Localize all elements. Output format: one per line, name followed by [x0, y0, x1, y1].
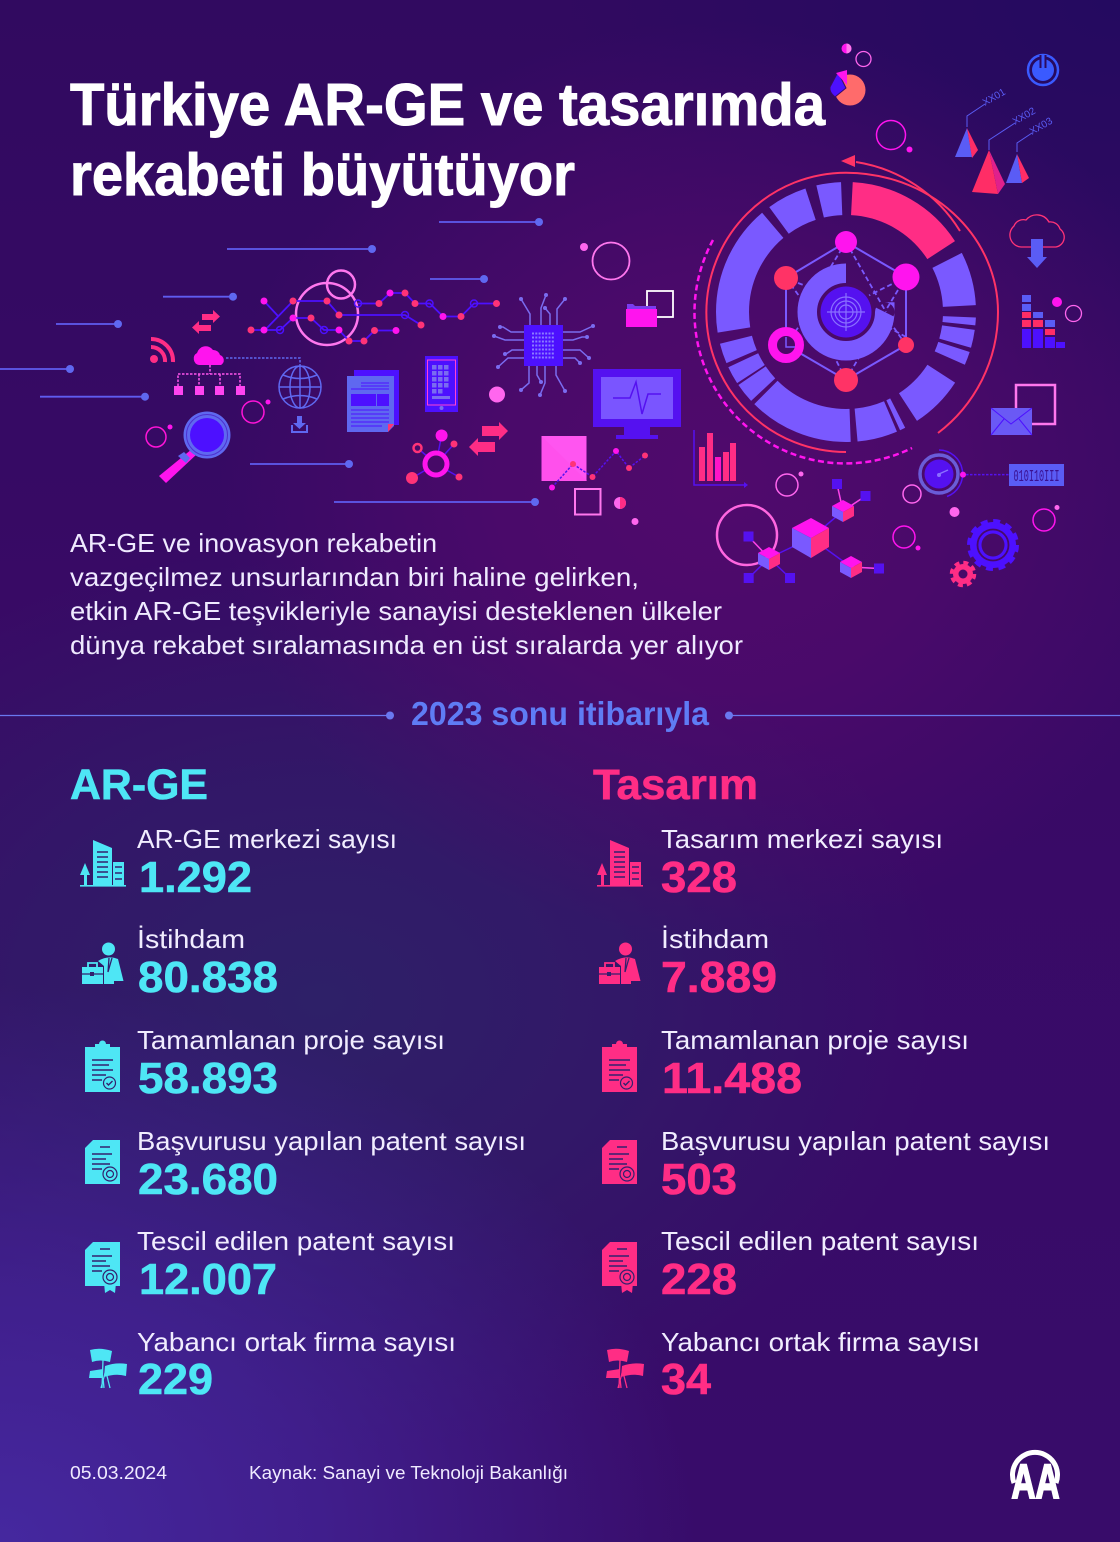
- stat: Tamamlanan proje sayısı: [602, 1025, 969, 1103]
- date divider heading: [0, 695, 1120, 732]
- decorative connector lines with dots: [0, 218, 543, 506]
- icon: exchange arrows large: [469, 422, 508, 456]
- footer source: Kaynak: Sanayi ve Teknoloji Bakanlığı: [249, 1463, 568, 1483]
- stat: Tasarım merkezi sayısı: [597, 824, 943, 902]
- cube network: [717, 479, 884, 583]
- icon: download: [292, 416, 307, 432]
- title: rekabeti büyütüyor: [70, 142, 575, 208]
- icon: cloud download: [1010, 215, 1064, 268]
- pyramid chart: XX03: [1028, 116, 1055, 138]
- central circular data dial: [694, 155, 998, 463]
- stat: İstihdam: İstihdam: [137, 924, 245, 954]
- icon: large gear: [969, 521, 1017, 569]
- footer date: 05.03.2024: [70, 1463, 167, 1483]
- stat: Başvurusu yapılan patent sayısı: [85, 1126, 526, 1204]
- stat: Yabancı ortak firma sayısı: Yabancı ortak firma sayısı: [661, 1327, 980, 1357]
- icon: power: [1028, 55, 1058, 85]
- icon: stacked bars: [1022, 295, 1082, 348]
- icon: envelope: [991, 385, 1055, 435]
- icon: newspaper document: [347, 370, 399, 432]
- intro paragraph: etkin AR-GE teşvikleriyle sanayisi desteklenen ülkeler: [70, 596, 722, 626]
- title: [70, 72, 826, 208]
- stat: Tescil edilen patent sayısı: [602, 1226, 979, 1304]
- heading: AR-GE: AR-GE: [70, 761, 208, 809]
- panel: Tasarım: [593, 761, 1050, 1404]
- stat: Tescil edilen patent sayısı: 12.007: [139, 1255, 277, 1304]
- ring and dot: [876, 120, 912, 152]
- icon: globe: [279, 366, 321, 408]
- stat: Tamamlanan proje sayısı: Tamamlanan proje sayısı: [661, 1025, 969, 1055]
- small rings left: [146, 400, 270, 447]
- dot: [489, 386, 505, 402]
- intro paragraph: vazgeçilmez unsurlarından biri haline gelirken,: [70, 562, 639, 592]
- stat: İstihdam: İstihdam: [661, 924, 769, 954]
- icon: bar chart: [694, 430, 748, 488]
- stat: AR-GE merkezi sayısı: AR-GE merkezi sayısı: [137, 824, 397, 854]
- icon: tablet: [425, 356, 458, 412]
- rings near pie chart: [842, 44, 871, 66]
- pyramid chart: [955, 87, 1055, 194]
- pyramid chart: XX01: [981, 87, 1008, 109]
- stat: Yabancı ortak firma sayısı: Yabancı ortak firma sayısı: [137, 1327, 456, 1357]
- icon: small gear: [952, 562, 974, 586]
- intro paragraph: AR-GE ve inovasyon rekabetin: [70, 528, 437, 558]
- stat: İstihdam: 7.889: [661, 953, 777, 1002]
- stat: Tescil edilen patent sayısı: [85, 1226, 455, 1304]
- stat: İstihdam: [82, 924, 278, 1002]
- stat: Tescil edilen patent sayısı: Tescil edilen patent sayısı: [137, 1226, 455, 1256]
- stat: Başvurusu yapılan patent sayısı: Başvurusu yapılan patent sayısı: [137, 1126, 526, 1156]
- icon: exchange arrows small: [192, 310, 220, 334]
- stat: Tescil edilen patent sayısı: Tescil edilen patent sayısı: [661, 1226, 979, 1256]
- network node icon centre: [406, 430, 462, 484]
- ring and dot top centre: [580, 242, 630, 280]
- icon: pie chart: [830, 70, 866, 106]
- intro paragraph: [70, 528, 743, 660]
- stat: Başvurusu yapılan patent sayısı: Başvurusu yapılan patent sayısı: [661, 1126, 1050, 1156]
- icon: folder with square: [626, 291, 673, 327]
- icon: microchip: [492, 293, 595, 397]
- scattered rings and dots right: [776, 472, 1060, 550]
- icon: monitor: [593, 369, 681, 439]
- icon: rss: [150, 339, 173, 363]
- stat: Yabancı ortak firma sayısı: 229: [138, 1355, 213, 1404]
- stat: Başvurusu yapılan patent sayısı: [602, 1126, 1050, 1204]
- icon: cloud hierarchy: [174, 346, 300, 395]
- date divider heading: 2023 sonu itibarıyla: [411, 695, 710, 732]
- intro paragraph: dünya rekabet sıralamasında en üst sıralarda yer alıyor: [70, 630, 743, 660]
- heading: Tasarım: Tasarım: [593, 761, 758, 809]
- stat: Tamamlanan proje sayısı: [85, 1025, 445, 1103]
- stat: Yabancı ortak firma sayısı: 34: [661, 1355, 712, 1404]
- logo: AA: [1012, 1452, 1060, 1509]
- stat: İstihdam: 80.838: [138, 953, 278, 1002]
- logo: AA: AA: [1012, 1456, 1060, 1509]
- stat: Tamamlanan proje sayısı: Tamamlanan proje sayısı: [137, 1025, 445, 1055]
- pyramid chart: XX02: [1011, 106, 1038, 128]
- stat: Tasarım merkezi sayısı: 328: [661, 853, 737, 902]
- panel: AR-GE: [70, 761, 526, 1404]
- stat: Tescil edilen patent sayısı: 228: [661, 1255, 737, 1304]
- stat: Yabancı ortak firma sayısı: [89, 1327, 456, 1404]
- title: Türkiye AR-GE ve tasarımda: [70, 72, 826, 138]
- stat: AR-GE merkezi sayısı: [80, 824, 397, 902]
- stat: Tamamlanan proje sayısı: 58.893: [138, 1054, 278, 1103]
- icon: magnifier: [159, 412, 230, 483]
- gauge and binary tag: 010I10III: [1014, 468, 1060, 487]
- gauge and binary tag: [920, 450, 1064, 496]
- stat: İstihdam: [599, 924, 777, 1002]
- stat: Yabancı ortak firma sayısı: [606, 1327, 980, 1404]
- stat: Başvurusu yapılan patent sayısı: 503: [661, 1155, 737, 1204]
- stat: AR-GE merkezi sayısı: 1.292: [139, 853, 252, 902]
- stat: Başvurusu yapılan patent sayısı: 23.680: [138, 1155, 278, 1204]
- circuit network illustration: [248, 270, 500, 345]
- stat: Tasarım merkezi sayısı: Tasarım merkezi sayısı: [661, 824, 943, 854]
- pink square and line chart: [542, 436, 648, 525]
- stat: Tamamlanan proje sayısı: 11.488: [662, 1054, 802, 1103]
